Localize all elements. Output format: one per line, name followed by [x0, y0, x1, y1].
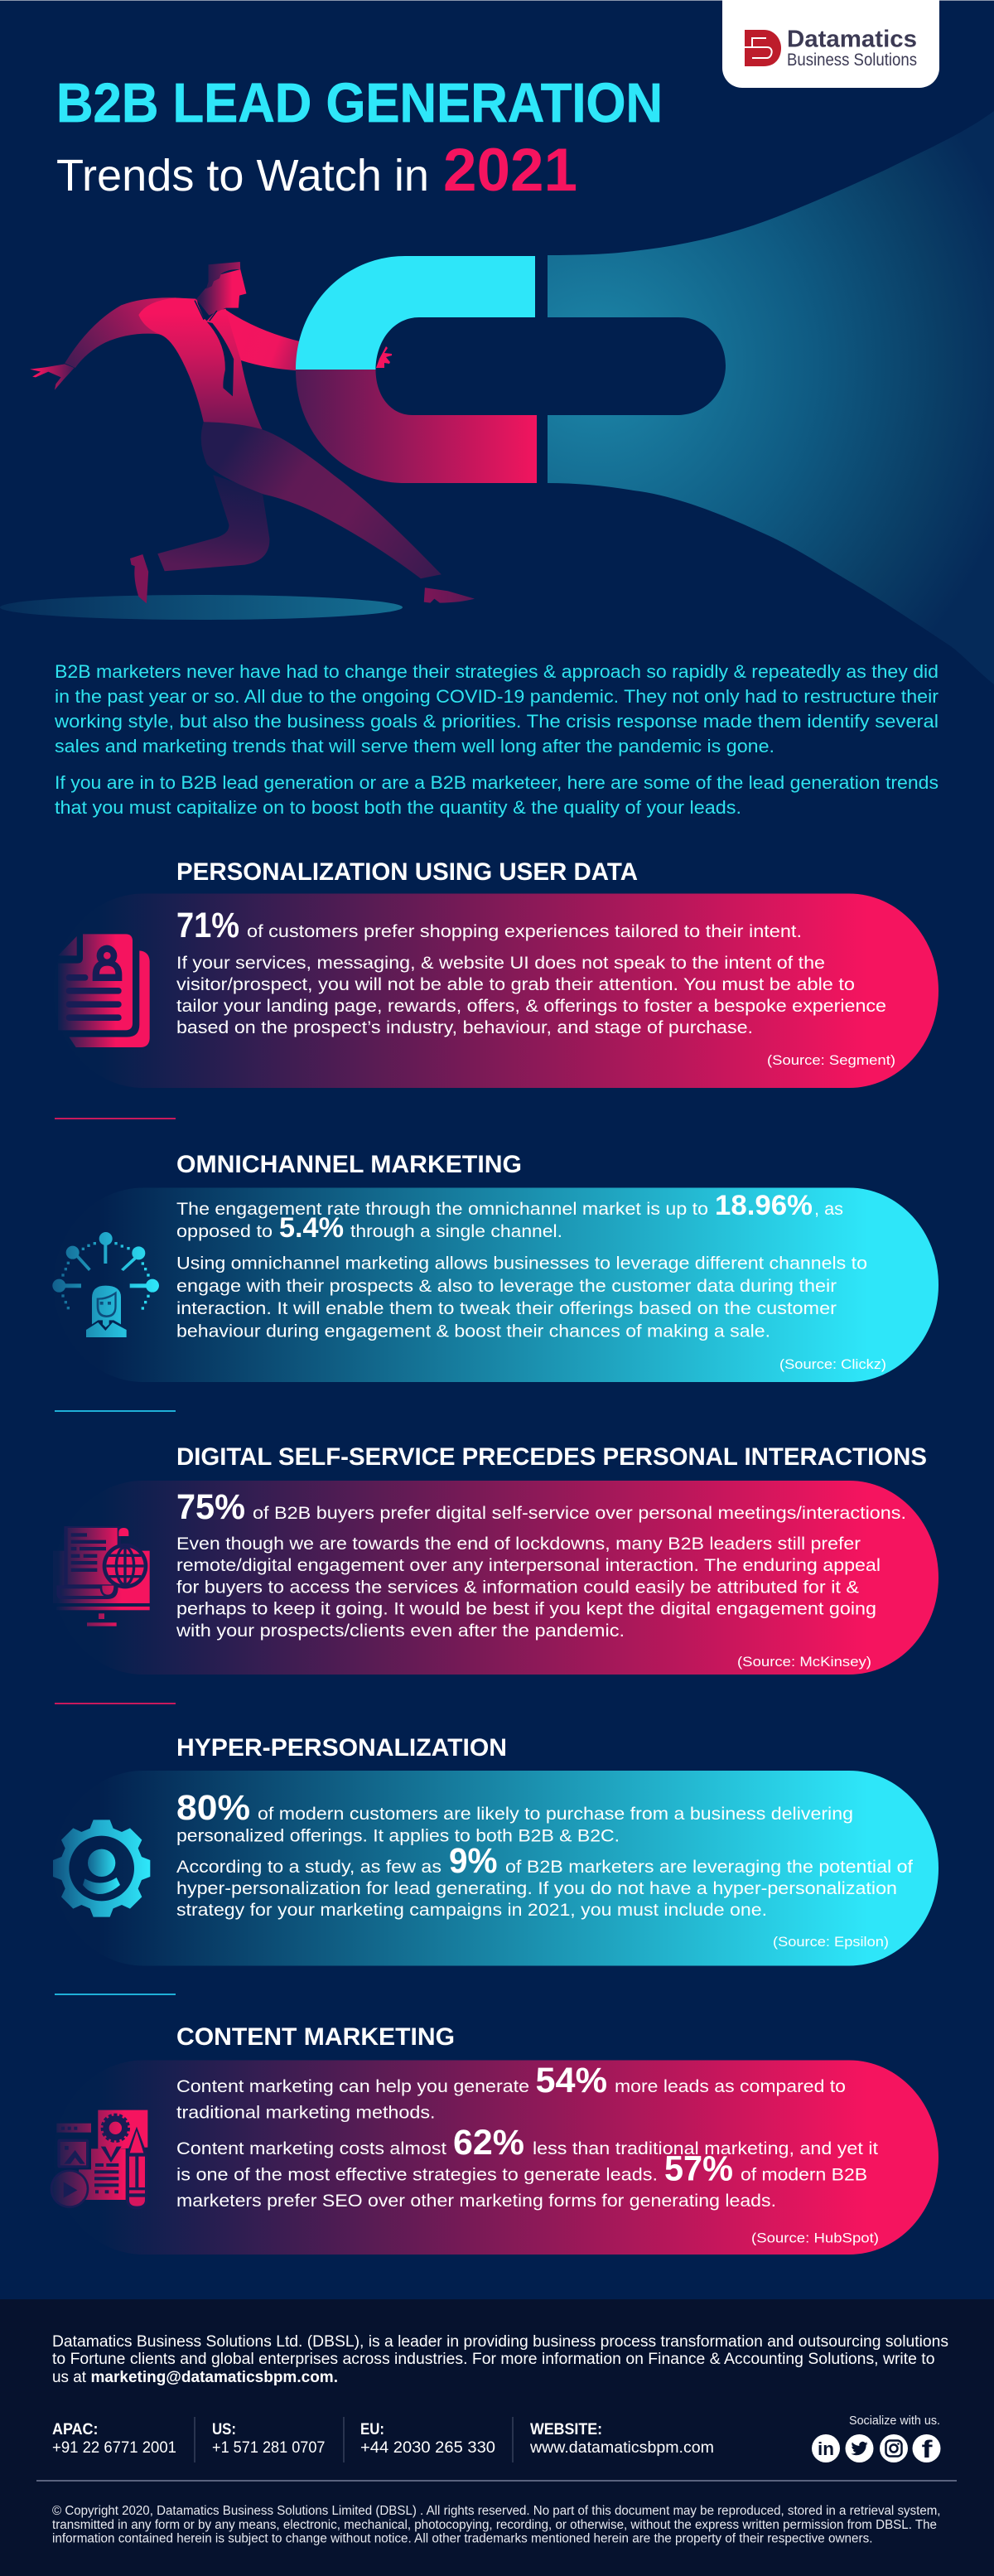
- body text: of B2B marketers are leveraging the potential of: [505, 1857, 913, 1877]
- contact: APAC: [52, 2421, 176, 2457]
- about text: marketing@datamaticsbpm.com.: [91, 2369, 338, 2386]
- heading: OMNICHANNEL MARKETING: [176, 1151, 522, 1178]
- contact: EU: EU:: [360, 2421, 384, 2438]
- intro text: sales and marketing trends that will serve them well long after the pandemic is gone.: [55, 736, 774, 756]
- body text: less than traditional marketing, and yet it: [533, 2139, 878, 2158]
- body text: [176, 953, 886, 1037]
- pill panel: [54, 1188, 939, 1382]
- contact: US: US:: [212, 2421, 236, 2438]
- icon: content toolkit: [51, 2110, 147, 2210]
- body text: tailor your landing page, rewards, offers, & offerings to foster a bespoke experience: [176, 996, 886, 1016]
- stat text: 54%: [535, 2061, 607, 2100]
- icon: instagram: [880, 2434, 908, 2462]
- socials: Socialize with us.: [849, 2414, 940, 2428]
- body text: with your prospects/clients even after the pandemic.: [176, 1621, 625, 1641]
- section: hyper-personalization: [53, 1734, 939, 1965]
- body text: [176, 1534, 881, 1641]
- pill panel: [54, 1771, 939, 1965]
- icon: facebook: f: [921, 2436, 934, 2463]
- icon: gear with person: [53, 1820, 150, 1917]
- intro text: [54, 661, 939, 818]
- intro text: If you are in to B2B lead generation or are a B2B marketeer, here are some of the lead generation trends: [55, 772, 939, 793]
- stat text: 18.96%: [715, 1190, 813, 1221]
- source: (Source: Epsilon): [773, 1934, 889, 1950]
- fingers on magnet: [376, 346, 392, 368]
- stat text: [176, 906, 802, 945]
- front leg: [201, 422, 442, 578]
- magnet pink pole: [296, 370, 537, 483]
- stat text: 5.4%: [279, 1212, 344, 1244]
- icon: linkedin: in: [818, 2438, 834, 2459]
- body text: of modern B2B: [741, 2164, 867, 2184]
- stat text: of modern customers are likely to purchase from a business delivering: [258, 1804, 853, 1824]
- horseshoe magnet: [296, 256, 537, 483]
- icon: person with channels: [52, 1232, 159, 1337]
- body text: [176, 2123, 878, 2211]
- body text: Content marketing costs almost: [176, 2139, 446, 2158]
- stat text: Content marketing can help you generate: [176, 2076, 529, 2096]
- stat text: traditional marketing methods.: [176, 2103, 436, 2123]
- socials: [812, 2414, 941, 2463]
- pill panel: [54, 2060, 939, 2255]
- pill panel: [54, 1481, 939, 1675]
- body text: perhaps to keep it going. It would be best if you kept the digital engagement going: [176, 1599, 876, 1619]
- title: [56, 72, 663, 204]
- body text: [176, 1841, 913, 1920]
- stat text: 75%: [176, 1487, 245, 1527]
- stat text: 80%: [176, 1788, 250, 1828]
- heading: CONTENT MARKETING: [176, 2023, 455, 2051]
- icon: document with profile: [58, 934, 150, 1047]
- tie: [207, 321, 234, 396]
- body text: based on the prospect’s industry, behaviour, and stage of purchase.: [176, 1017, 753, 1037]
- copyright: [52, 2504, 941, 2545]
- footer: [0, 2299, 994, 2576]
- intro text: B2B marketers never have had to change their strategies & approach so rapidly & repeatedly as they did: [55, 661, 939, 682]
- body text: Using omnichannel marketing allows businesses to leverage different channels to: [176, 1253, 867, 1273]
- icon: monitor with globe: [53, 1526, 150, 1626]
- logo wordmark: Datamatics: [787, 27, 917, 53]
- stat text: of customers prefer shopping experiences tailored to their intent.: [247, 921, 802, 941]
- contact: APAC: +91 22 6771 2001: [52, 2439, 176, 2457]
- body text: strategy for your marketing campaigns in 2021, you must include one.: [176, 1900, 767, 1920]
- body text: hyper-personalization for lead generating. If you do not have a hyper-personalization: [176, 1878, 897, 1898]
- icon: facebook: [913, 2434, 941, 2463]
- contact: EU: [360, 2421, 495, 2457]
- body text: engage with their prospects & also to leverage the customer data during their: [176, 1276, 837, 1296]
- copyright: © Copyright 2020, Datamatics Business Solutions Limited (DBSL) . All rights reserved. No part of this document may be reproduced, stored in a retrieval system,: [52, 2504, 941, 2518]
- floor shadow: [0, 595, 403, 620]
- section: omnichannel marketing: [52, 1151, 939, 1382]
- source: (Source: HubSpot): [751, 2230, 879, 2245]
- body text: behaviour during engagement & boost their chances of making a sale.: [176, 1321, 770, 1341]
- body text: 57%: [664, 2149, 733, 2189]
- intro text: working style, but also the business goals & priorities. The crisis response made them identify several: [54, 711, 939, 732]
- logo wordmark: [787, 27, 917, 70]
- section: digital self-service: [53, 1443, 939, 1675]
- source: (Source: Clickz): [779, 1356, 886, 1372]
- stat text: [176, 2061, 846, 2123]
- icon: linkedin: [812, 2434, 840, 2462]
- pill panel: [54, 893, 939, 1088]
- about text: Datamatics Business Solutions Ltd. (DBSL), is a leader in providing business process transformation and outsourcing solutions: [52, 2333, 948, 2351]
- heading: DIGITAL SELF-SERVICE PRECEDES PERSONAL INTERACTIONS: [176, 1443, 927, 1471]
- contact: EU: +44 2030 265 330: [360, 2439, 495, 2457]
- stat text: of B2B buyers prefer digital self-service over personal meetings/interactions.: [253, 1503, 906, 1523]
- body text: If your services, messaging, & website UI does not speak to the intent of the: [176, 953, 825, 973]
- body text: Even though we are towards the end of lockdowns, many B2B leaders still prefer: [176, 1534, 861, 1554]
- back arm: [65, 297, 200, 368]
- copyright: information contained herein is subject to change without notice. All other trademarks mentioned herein are the property of their respective owners.: [52, 2532, 873, 2545]
- section: content marketing: [51, 2023, 939, 2255]
- body text: [176, 1253, 867, 1341]
- body text: visitor/prospect, you will not be able to grab their attention. You must be able to: [176, 974, 855, 994]
- heading: PERSONALIZATION USING USER DATA: [176, 858, 638, 886]
- magnet cyan pole: [296, 256, 535, 370]
- icon: twitter: [845, 2434, 873, 2462]
- stat text: opposed to: [176, 1221, 273, 1241]
- contact: US: +1 571 281 0707: [212, 2439, 325, 2457]
- intro text: in the past year or so. All due to the ongoing COVID-19 pandemic. They not only had to restructure their: [55, 686, 939, 707]
- body text: interaction. It will enable them to tweak their offerings based on the customer: [176, 1298, 837, 1318]
- copyright: transmitted in any form or by any means, electronic, mechanical, photocopying, recording, or otherwise, without the express written permission from DBSL. The: [52, 2518, 937, 2532]
- about text: to Fortune clients and global enterprises across industries. For more information on Finance & Accounting Solutions, write to: [52, 2351, 934, 2368]
- back leg: [157, 475, 269, 571]
- about text: us at: [52, 2369, 87, 2386]
- title: Trends to Watch in: [56, 151, 429, 201]
- stat text: [176, 1190, 843, 1244]
- stat text: [176, 1487, 906, 1527]
- contact: website: [529, 2421, 714, 2457]
- running businessman: [30, 262, 475, 603]
- about text: [52, 2333, 948, 2386]
- logo mark: [745, 30, 781, 66]
- contact: APAC: APAC:: [52, 2421, 98, 2438]
- stat text: The engagement rate through the omnichannel market is up to: [176, 1199, 708, 1219]
- torso: [138, 297, 263, 429]
- teal magnetic beam: [548, 111, 994, 684]
- body text: According to a study, as few as: [176, 1857, 442, 1877]
- body text: is one of the most effective strategies to generate leads.: [176, 2164, 658, 2184]
- stat text: , as: [814, 1199, 843, 1219]
- title: B2B LEAD GENERATION: [56, 72, 663, 134]
- body text: 9%: [449, 1841, 497, 1881]
- body text: 62%: [453, 2123, 524, 2163]
- stat text: through a single channel.: [350, 1221, 562, 1241]
- stat text: personalized offerings. It applies to both B2B & B2C.: [176, 1826, 620, 1846]
- stat text: [176, 1788, 853, 1846]
- head: [196, 269, 246, 316]
- logo wordmark: Business Solutions: [787, 50, 917, 70]
- body text: for buyers to access the services & information could easily be attributed for it &: [176, 1578, 859, 1597]
- back hand: [30, 364, 75, 390]
- heading: HYPER-PERSONALIZATION: [176, 1734, 507, 1762]
- contact: website: www.datamaticsbpm.com: [529, 2439, 714, 2457]
- back shoe: [130, 554, 148, 603]
- front shoe: [424, 587, 475, 603]
- stat text: 71%: [176, 906, 239, 945]
- hair: [206, 262, 240, 289]
- contact: website: WEBSITE:: [530, 2421, 602, 2438]
- body text: remote/digital engagement over any interpersonal interaction. The enduring appeal: [176, 1555, 881, 1575]
- intro text: that you must capitalize on to boost both the quantity & the quality of your leads.: [55, 797, 741, 818]
- source: (Source: Segment): [767, 1052, 895, 1068]
- contact: US: [212, 2421, 325, 2457]
- logo card: [722, 0, 939, 88]
- stat text: more leads as compared to: [615, 2076, 846, 2096]
- source: (Source: McKinsey): [737, 1654, 871, 1670]
- title: 2021: [443, 137, 577, 204]
- section: personalization using user data: [54, 858, 939, 1088]
- body text: marketers prefer SEO over other marketing forms for generating leads.: [176, 2191, 776, 2211]
- front arm: [220, 309, 302, 370]
